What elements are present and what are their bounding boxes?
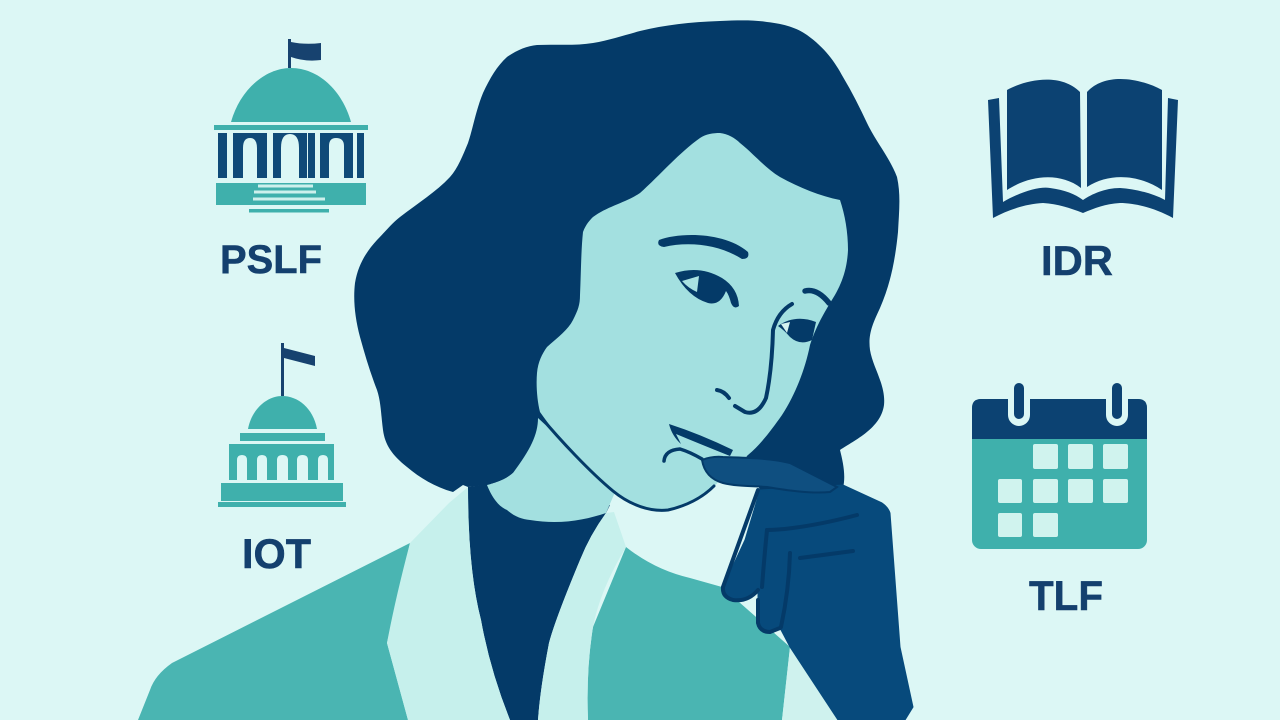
columns (218, 133, 364, 178)
nose (735, 304, 792, 413)
dome (248, 396, 317, 429)
ring halos (1008, 399, 1128, 426)
left lapel (387, 487, 510, 720)
cover (988, 98, 1178, 218)
left eyebrow (658, 235, 748, 259)
left page (1007, 80, 1081, 190)
right page (1087, 79, 1162, 190)
PSLF item (214, 39, 368, 282)
right sleeve cuff (782, 647, 840, 720)
jacket right (588, 547, 790, 720)
neck (487, 418, 616, 522)
left eye (675, 270, 739, 307)
dark shirt (468, 484, 610, 720)
icon: calendar (972, 388, 1147, 549)
roof slab (240, 433, 325, 441)
bottom step (249, 209, 329, 212)
IDR item (988, 79, 1178, 284)
mouth (669, 424, 733, 456)
right eyebrow (805, 290, 829, 303)
calendar header (972, 399, 1147, 439)
icon: capitol building (218, 343, 346, 507)
TLF item (972, 388, 1147, 619)
cornice (214, 125, 368, 130)
flag (288, 39, 321, 68)
hand (723, 485, 913, 720)
date squares (998, 444, 1128, 537)
icon: domed building (214, 39, 368, 212)
label: IOT: IOT (242, 530, 311, 577)
index finger (702, 457, 837, 493)
IOT item (218, 343, 346, 577)
base (216, 183, 366, 205)
right lapel (538, 512, 626, 720)
label: TLF: TLF (1029, 572, 1103, 619)
nostril (717, 390, 729, 398)
figure: thoughtful woman (138, 20, 913, 720)
flag (281, 343, 315, 396)
base (221, 483, 343, 501)
binder rings (1019, 388, 1117, 414)
dome (231, 68, 351, 122)
right eye (778, 319, 816, 342)
face (537, 133, 848, 510)
label: PSLF: PSLF (220, 238, 322, 282)
hair (354, 20, 899, 492)
lower lip (664, 449, 702, 461)
steps (253, 186, 325, 199)
bottom step (218, 502, 346, 507)
jacket left (138, 543, 410, 720)
calendar body (972, 399, 1147, 549)
colonnade (229, 444, 334, 480)
icon: open book (988, 79, 1178, 218)
left eye highlight (682, 276, 699, 292)
finger lines (723, 490, 857, 632)
jaw line (540, 416, 714, 510)
right eye highlight (781, 322, 790, 333)
label: IDR: IDR (1041, 237, 1113, 284)
